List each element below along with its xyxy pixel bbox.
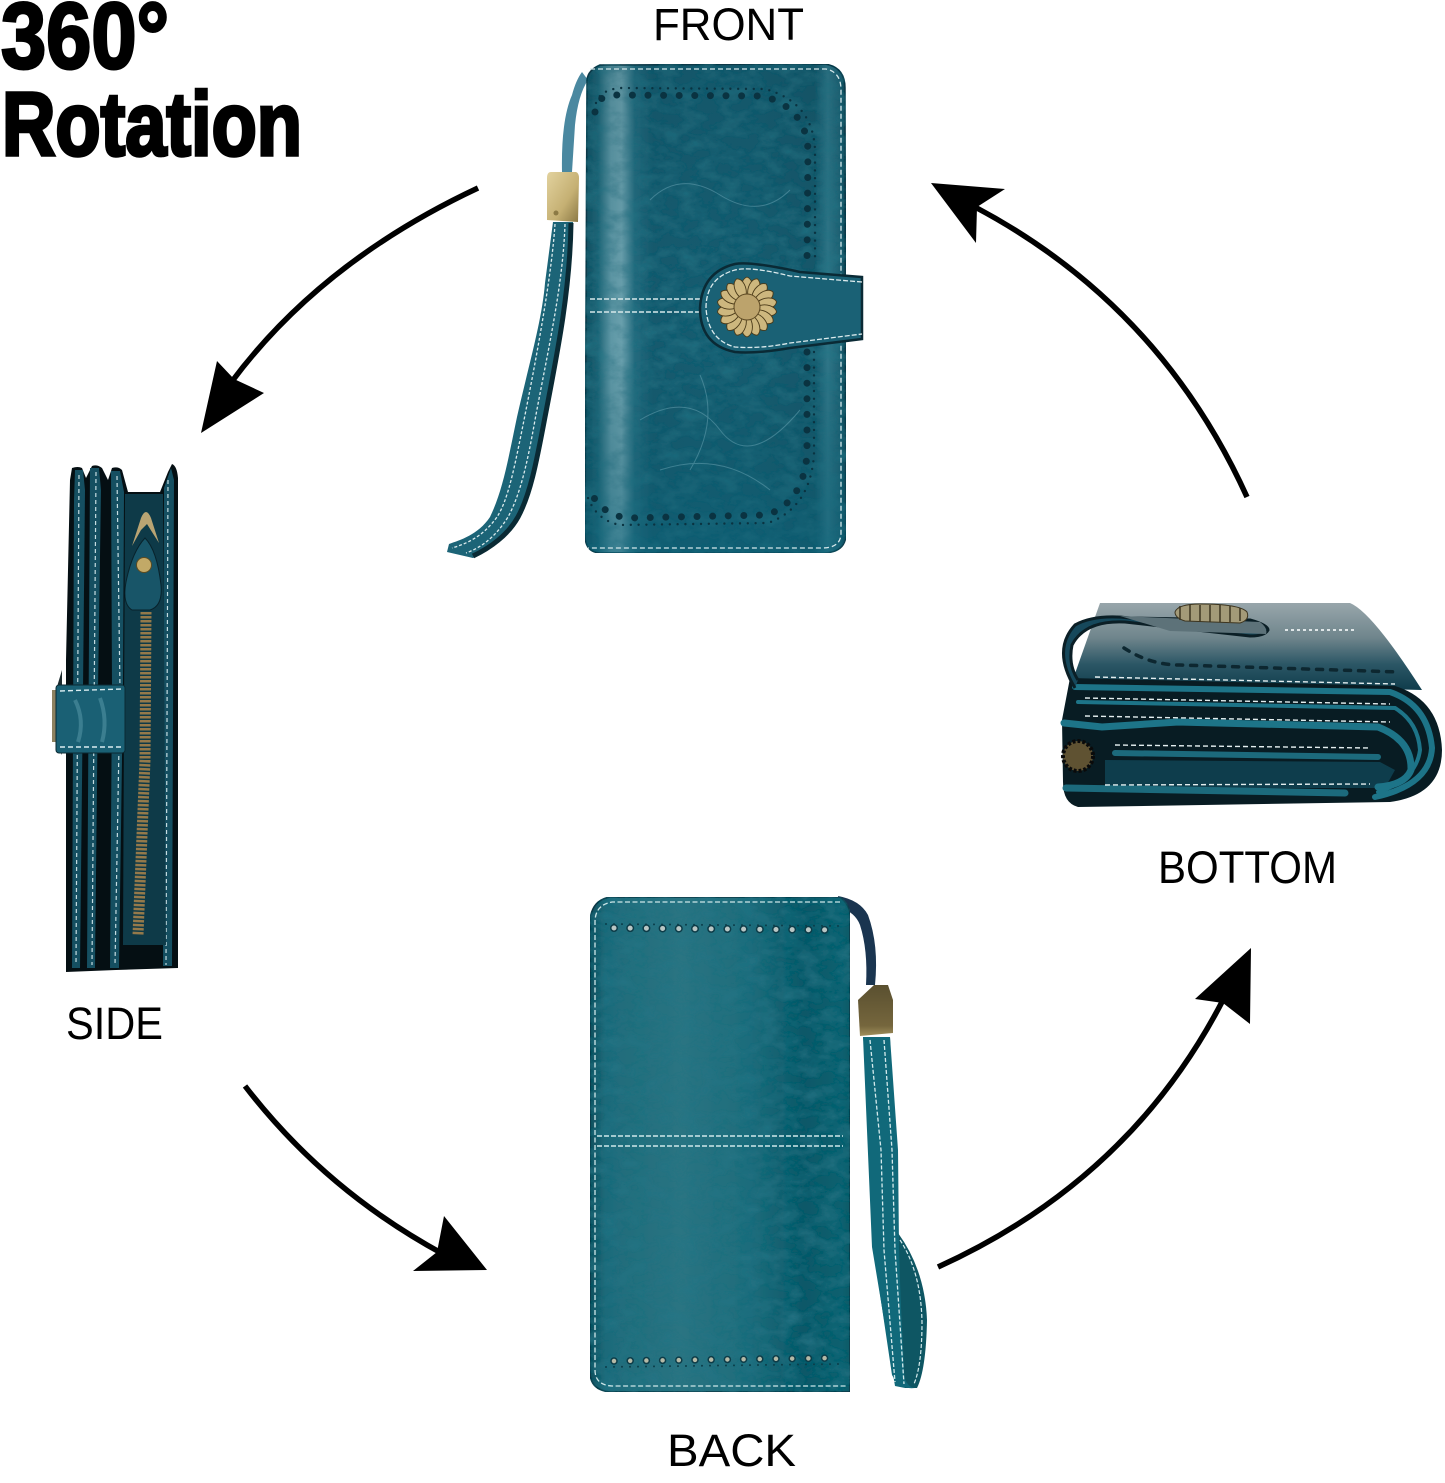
- metal clasp, front strap: [547, 172, 579, 222]
- teal pocket bands, bottom view: [1064, 687, 1432, 797]
- label: SIDE: SIDE: [66, 998, 163, 1049]
- wrist strap, front: [447, 72, 588, 558]
- zipper pocket, side: [123, 494, 166, 945]
- zipper tab: [125, 512, 161, 610]
- arrow: front to side: [201, 188, 478, 433]
- leather veins, front: [640, 184, 800, 490]
- brogue dots, back: [606, 924, 838, 1367]
- edge stitching, front: [588, 69, 841, 548]
- centre seam, back: [597, 1136, 843, 1146]
- flower button edge, bottom view: [1175, 604, 1248, 623]
- centre seam, front: [590, 299, 702, 312]
- wallet: bottom view: [1062, 603, 1442, 807]
- flower button, front: [717, 277, 777, 337]
- wallet body, back: [590, 897, 850, 1392]
- flap and strap loop, bottom view: [1064, 616, 1268, 688]
- label: FRONT: FRONT: [653, 0, 804, 50]
- wallet body, front: [585, 64, 846, 553]
- closure flap, front: [700, 263, 862, 352]
- dark side body: [66, 464, 178, 972]
- wallet: back view: [590, 896, 927, 1392]
- label: BACK: BACK: [667, 1425, 796, 1476]
- label: BOTTOM: BOTTOM: [1158, 842, 1337, 893]
- wallet: front view: [447, 64, 862, 558]
- wallet: side view: [52, 464, 178, 972]
- title: 360° Rotation: Rotation: [2, 75, 302, 175]
- inner panels, side: [72, 468, 174, 968]
- arrow: back to bottom: [938, 948, 1251, 1267]
- zipper end, bottom view: [1063, 741, 1093, 771]
- title: 360° Rotation: [1, 0, 302, 175]
- brogue row, bottom view: [1124, 648, 1400, 672]
- stitching, bottom view: [1085, 677, 1395, 785]
- arrow: bottom to front: [931, 183, 1247, 497]
- pocket interior, bottom view: [1105, 760, 1395, 788]
- zipper teeth: [138, 612, 146, 935]
- arrow: side to back: [245, 1086, 487, 1271]
- wrist strap, back: [838, 896, 927, 1388]
- top surface, bottom view: [1072, 603, 1422, 690]
- metal clasp, back strap: [858, 985, 893, 1036]
- strap band, side: [52, 670, 125, 755]
- brogue dots, front: [586, 88, 815, 525]
- stitching, side: [76, 472, 168, 965]
- edge stitching, back: [595, 902, 846, 1386]
- folded edges, bottom view: [1062, 678, 1442, 807]
